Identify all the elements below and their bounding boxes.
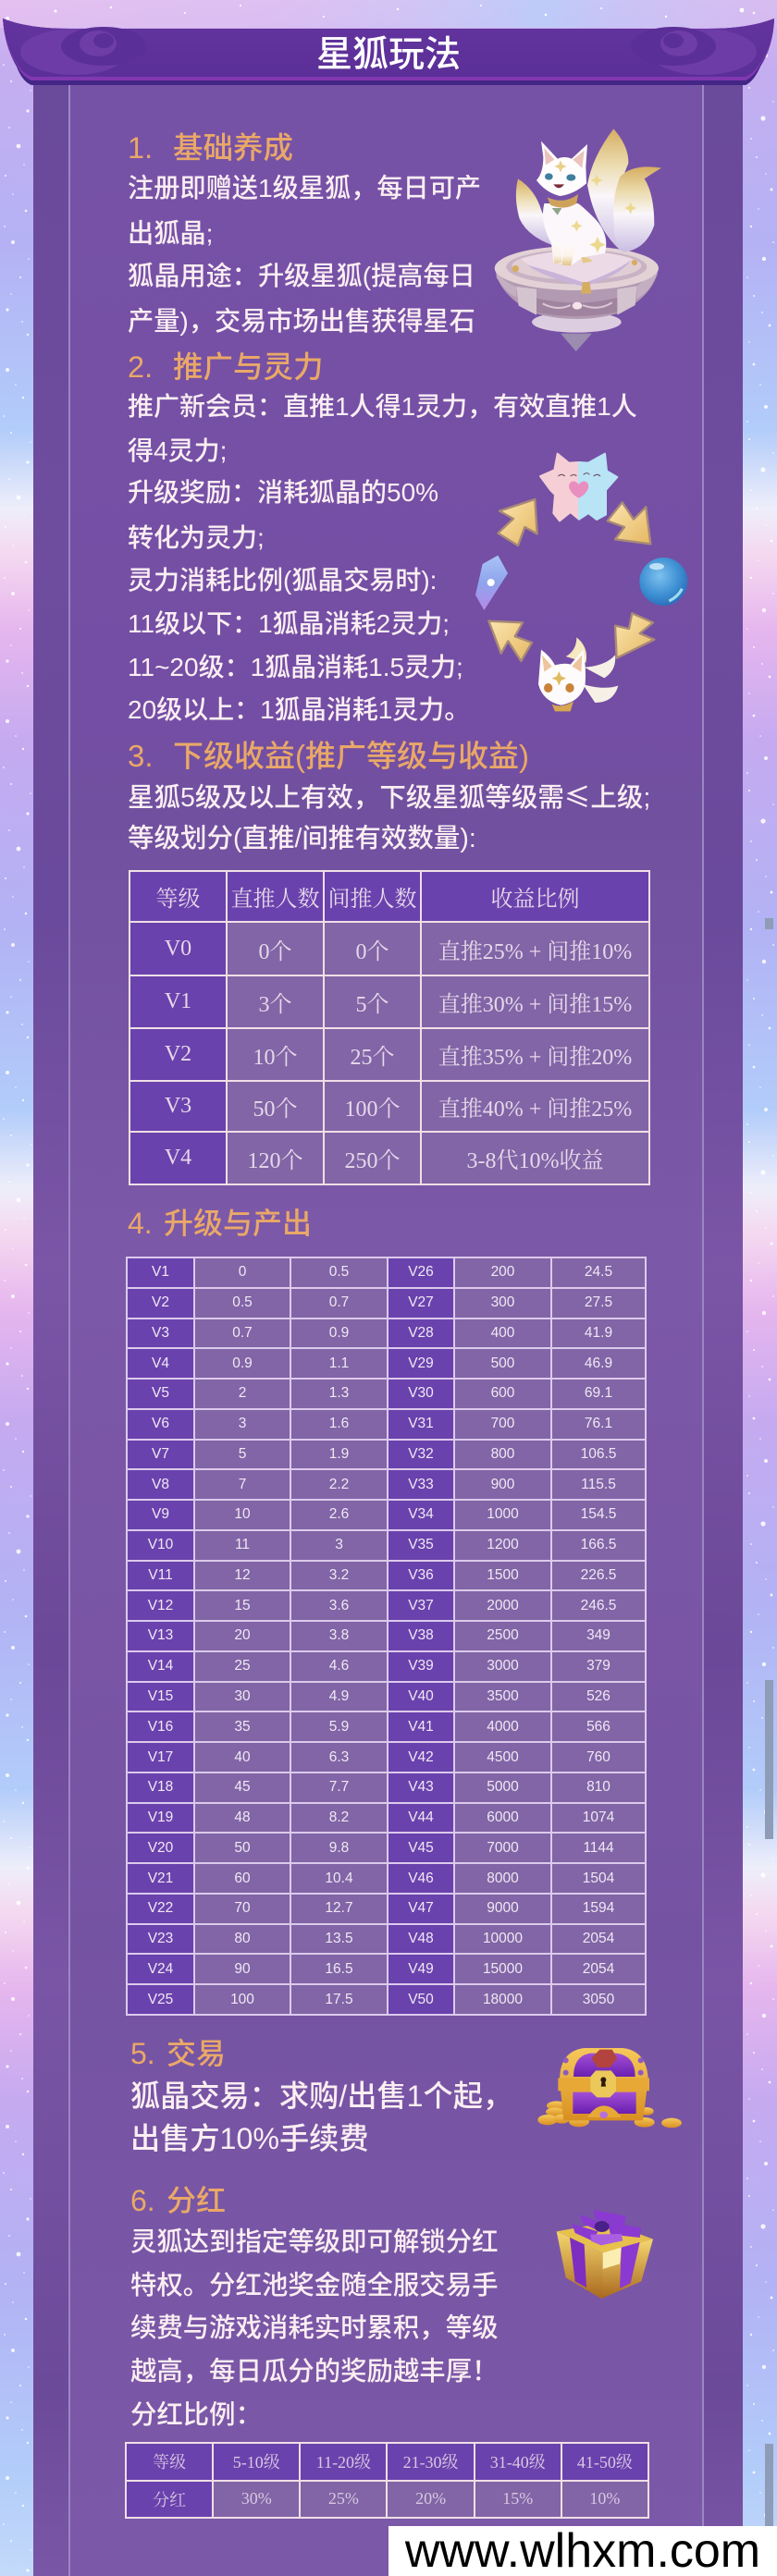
heading 6	[130, 2184, 226, 2217]
table: level output: 9.8	[329, 1840, 349, 1856]
section 2 text: 11级以下：1狐晶消耗2灵力;	[128, 609, 450, 638]
table: level output: 5	[239, 1446, 246, 1462]
table: level output: 1000	[487, 1506, 519, 1522]
table: level output: 1500	[487, 1567, 519, 1583]
icon: hugging stars	[540, 454, 617, 521]
table: promotion levels: 0个	[355, 939, 388, 963]
table: dividend ratios: 15%	[502, 2489, 533, 2508]
table: level output: V23	[148, 1931, 173, 1946]
table: level output: V2	[152, 1294, 169, 1310]
table: level output: 115.5	[581, 1477, 616, 1492]
table: level output: 226.5	[581, 1567, 616, 1583]
table: level output: 45	[234, 1779, 251, 1795]
table: level output: 526	[586, 1688, 610, 1704]
table: level output: 10000	[483, 1931, 523, 1946]
table: level output: 15000	[483, 1961, 523, 1977]
section 3: subordinate earnings	[128, 739, 650, 1185]
table: level output: V4	[152, 1355, 169, 1371]
table: level output: 166.5	[581, 1537, 616, 1552]
table: promotion levels	[129, 870, 650, 1185]
section 4: upgrades and output	[126, 1207, 647, 2016]
section 1 text	[128, 173, 481, 336]
table: level output: 13.5	[325, 1931, 353, 1946]
table: level output: V26	[408, 1264, 434, 1280]
table: level output: V21	[148, 1871, 173, 1886]
table: level output: V11	[148, 1567, 173, 1583]
table: level output: V35	[408, 1537, 434, 1552]
table: promotion levels: 25个	[350, 1046, 394, 1070]
table: level output: 8.2	[329, 1809, 349, 1825]
table: level output: V41	[408, 1719, 434, 1735]
table: level output: 1074	[583, 1809, 614, 1825]
section 2 text: 得4灵力;	[128, 436, 227, 465]
icon: chibi fox	[538, 637, 618, 711]
table: level output: 76.1	[585, 1416, 612, 1431]
table: level output: 760	[586, 1749, 610, 1765]
section 2 text: 升级奖励：消耗狐晶的50%	[128, 478, 438, 507]
table: level output: 27.5	[585, 1294, 612, 1310]
table: level output: V49	[408, 1961, 434, 1977]
table: level output: V17	[148, 1749, 173, 1765]
section 6 text: 特权。分红池奖金随全服交易手	[130, 2271, 498, 2300]
table: dividend ratios: 41-50级	[577, 2453, 633, 2472]
table: level output: V28	[408, 1325, 434, 1341]
table: level output: V34	[408, 1506, 434, 1522]
table: level output: 1.9	[329, 1446, 349, 1462]
table: level output: 2054	[583, 1931, 614, 1946]
table: level output: 0	[239, 1264, 246, 1280]
table: level output: 106.5	[581, 1446, 616, 1462]
heading 3: 下级收益(推广等级与收益)	[173, 739, 529, 773]
section 6 text	[130, 2227, 498, 2430]
table: promotion levels: 等级	[155, 888, 200, 912]
table: level output: V6	[152, 1416, 169, 1431]
table: level output: V16	[148, 1719, 173, 1735]
table: level output: 17.5	[325, 1992, 353, 2007]
table: level output: 4000	[487, 1719, 519, 1735]
table: level output: 700	[491, 1416, 514, 1431]
table: level output: V36	[408, 1567, 434, 1583]
section 3 text: 星狐5级及以上有效，下级星狐等级需 上级;	[128, 783, 650, 813]
table: level output: 2	[239, 1385, 246, 1401]
table: promotion levels: 120个	[248, 1149, 303, 1173]
table: level output: V37	[408, 1598, 434, 1613]
section 6: dividends	[125, 2184, 649, 2519]
table: level output: 60	[234, 1871, 251, 1886]
table: level output: 3.6	[329, 1598, 349, 1613]
heading 1: 1.	[128, 131, 153, 165]
table: level output: 4.6	[329, 1658, 349, 1674]
table: level output: V1	[152, 1264, 169, 1280]
table: promotion levels: 250个	[344, 1149, 400, 1173]
scroll artifacts at right edge	[765, 918, 773, 2526]
table: level output: 8000	[487, 1871, 519, 1886]
heading 6: 分红	[166, 2184, 226, 2217]
section 2 text: 20级以上：1狐晶消耗1灵力。	[128, 695, 470, 724]
table: level output: 41.9	[585, 1325, 612, 1341]
table: level output: 3050	[583, 1992, 614, 2007]
table: level output: 600	[491, 1385, 514, 1401]
table: level output: V5	[152, 1385, 169, 1401]
heading 3: 3.	[128, 739, 154, 773]
section 5 text: 狐晶交易：求购/出售1个起，	[130, 2079, 512, 2113]
section 2 text: 灵力消耗比例(狐晶交易时):	[128, 566, 437, 595]
table: level output: 40	[234, 1749, 251, 1765]
table: promotion levels: 5个	[355, 993, 388, 1017]
table: level output: 46.9	[585, 1355, 612, 1371]
table: level output: V42	[408, 1749, 434, 1765]
table: level output: 800	[491, 1446, 514, 1462]
table: promotion levels: V4	[165, 1146, 191, 1170]
table: level output: 1504	[583, 1871, 614, 1886]
table: dividend ratios: 21-30级	[403, 2453, 459, 2472]
table: level output: 90	[234, 1961, 251, 1977]
table: level output: V43	[408, 1779, 434, 1795]
table: level output: V33	[408, 1477, 434, 1492]
table: level output: 20	[234, 1627, 251, 1643]
table: level output: 0.7	[329, 1294, 349, 1310]
table: level output: V50	[408, 1992, 434, 2007]
table: level output: V14	[148, 1658, 173, 1674]
table: level output: V13	[148, 1627, 173, 1643]
table: level output: 18000	[483, 1992, 523, 2007]
heading 5: 5.	[130, 2037, 155, 2070]
table: level output: 0.5	[329, 1264, 349, 1280]
table: level output: 246.5	[581, 1598, 616, 1613]
table: level output: 100	[230, 1992, 254, 2007]
table: level output: 7000	[487, 1840, 519, 1856]
table: level output: 400	[491, 1325, 514, 1341]
section 2: promotion and spirit power	[128, 350, 637, 724]
table: promotion levels: 10个	[253, 1046, 298, 1070]
table: level output: 48	[234, 1809, 251, 1825]
title banner	[3, 18, 774, 85]
table: level output: 1.6	[329, 1416, 349, 1431]
table: level output: V48	[408, 1931, 434, 1946]
table: level output: 69.1	[585, 1385, 612, 1401]
table: level output: 7.7	[329, 1779, 349, 1795]
table: level output: V12	[148, 1598, 173, 1613]
table: level output: V30	[408, 1385, 434, 1401]
section 1: basic cultivation	[128, 131, 481, 336]
icon: gift box	[557, 2210, 653, 2299]
table: level output: 16.5	[325, 1961, 353, 1977]
section 2 text: 11~20级：1狐晶消耗1.5灵力;	[128, 653, 463, 681]
table: level output: 80	[234, 1931, 251, 1946]
table: promotion levels: 收益比例	[490, 888, 579, 912]
table: level output: V44	[408, 1809, 434, 1825]
table: level output: 7	[239, 1477, 246, 1492]
table: level output: 12.7	[325, 1900, 353, 1916]
table: level output: 3	[335, 1537, 343, 1552]
table: level output: 200	[491, 1264, 514, 1280]
section 1 text: 注册即赠送1级星狐，每日可产	[128, 173, 481, 202]
table: level output: 11	[235, 1537, 250, 1552]
table: level output: V46	[408, 1871, 434, 1886]
table: promotion levels: V3	[165, 1094, 191, 1118]
section 5: trading	[130, 2037, 512, 2155]
heading 2: 2.	[128, 350, 153, 384]
arrows	[488, 499, 654, 661]
section 2 text: 转化为灵力;	[128, 523, 265, 552]
banner title text: 星狐玩法	[316, 35, 461, 75]
section 1 text: 产量)，交易市场出售获得星石	[128, 306, 475, 336]
section 6 text: 灵狐达到指定等级即可解锁分红	[130, 2227, 498, 2257]
heading 1: 基础养成	[173, 131, 293, 165]
table: dividend ratios: 25%	[328, 2489, 359, 2508]
table: promotion levels: 直推25% + 间推10%	[438, 939, 632, 963]
table: level output: 154.5	[581, 1506, 616, 1522]
table: level output: V9	[152, 1506, 169, 1522]
table: level output: 6000	[487, 1809, 519, 1825]
table: level output: V22	[148, 1900, 173, 1916]
section 3 text	[128, 777, 650, 853]
table: promotion levels: V2	[165, 1042, 191, 1066]
table: level output: V47	[408, 1900, 434, 1916]
table: promotion levels: 0个	[259, 939, 292, 963]
heading 5: 交易	[166, 2037, 226, 2070]
table: level output: 12	[234, 1567, 251, 1583]
section 5 text	[130, 2079, 512, 2155]
section 6 text: 越高，每日瓜分的奖励越丰厚！	[130, 2357, 498, 2386]
illustration: spirit cycle with arrows	[475, 453, 688, 712]
table: level output: 24.5	[585, 1264, 612, 1280]
table: level output: 30	[234, 1688, 251, 1704]
table: promotion levels: V1	[165, 989, 191, 1013]
table: level output: 3.2	[329, 1567, 349, 1583]
table: level output: 2000	[487, 1598, 519, 1613]
table: level output: V45	[408, 1840, 434, 1856]
table: level output	[126, 1257, 647, 2016]
table: level output: 4500	[487, 1749, 519, 1765]
table: promotion levels: 直推人数	[231, 888, 320, 912]
table: level output: 300	[491, 1294, 514, 1310]
table: level output: 2500	[487, 1627, 519, 1643]
table: level output: V3	[152, 1325, 169, 1341]
table: level output: V40	[408, 1688, 434, 1704]
table: level output: 1.1	[329, 1355, 349, 1371]
table: promotion levels: 3-8代10%收益	[466, 1149, 603, 1173]
table: level output: 2054	[583, 1961, 614, 1977]
table: level output: V31	[408, 1416, 434, 1431]
section 3 text: 等级划分(直推/间推有效数量):	[128, 824, 476, 853]
table: level output: V29	[408, 1355, 434, 1371]
table: level output: 500	[491, 1355, 514, 1371]
table: promotion levels: 直推30% + 间推15%	[438, 993, 632, 1017]
icon: treasure chest with coins	[537, 2048, 682, 2128]
table: level output: V27	[408, 1294, 434, 1310]
table: level output: 379	[586, 1658, 610, 1674]
table: level output: 900	[491, 1477, 514, 1492]
section 6 text: 续费与游戏消耗实时累积，等级	[130, 2313, 498, 2343]
table: dividend ratios: 31-40级	[490, 2453, 546, 2472]
table: promotion levels: V0	[165, 936, 191, 960]
icon: blue orb	[639, 558, 687, 606]
section 2 text: 推广新会员：直推1人得1灵力，有效直推1人	[128, 392, 637, 421]
table: dividend ratios	[125, 2442, 649, 2519]
table: level output: 70	[234, 1900, 251, 1916]
table: level output: V10	[148, 1537, 173, 1552]
table: level output: 15	[234, 1598, 251, 1613]
table: level output: V7	[152, 1446, 169, 1462]
table: level output: 2.2	[329, 1477, 349, 1492]
table: level output: 25	[234, 1658, 251, 1674]
heading 2: 推广与灵力	[173, 350, 324, 384]
table: promotion levels: 间推人数	[327, 888, 416, 912]
table: level output: 4.9	[329, 1688, 349, 1704]
heading 5	[130, 2037, 226, 2070]
table: level output: V32	[408, 1446, 434, 1462]
table: dividend ratios: 5-10级	[233, 2453, 280, 2472]
table: level output: V39	[408, 1658, 434, 1674]
table: level output: 566	[586, 1719, 610, 1735]
table: dividend ratios: 等级	[153, 2453, 186, 2472]
table: level output: 10.4	[325, 1871, 353, 1886]
table: level output: 5.9	[329, 1719, 349, 1735]
table: level output: 810	[586, 1779, 610, 1795]
table: level output: 10	[234, 1506, 251, 1522]
table: promotion levels: 50个	[253, 1098, 298, 1122]
table: level output: 2.6	[329, 1506, 349, 1522]
table: level output: 0.5	[232, 1294, 253, 1310]
table: level output: 9000	[487, 1900, 519, 1916]
table: level output: 3500	[487, 1688, 519, 1704]
table: level output: V25	[148, 1992, 173, 2007]
table: dividend ratios: 10%	[589, 2489, 620, 2508]
table: level output: V38	[408, 1627, 434, 1643]
table: level output: V19	[148, 1809, 173, 1825]
table: promotion levels: 3个	[259, 993, 292, 1017]
table: level output: 0.7	[232, 1325, 253, 1341]
table: level output: 50	[234, 1840, 251, 1856]
section 1 text: 狐晶用途：升级星狐(提高每日	[128, 261, 475, 290]
table: promotion levels: 100个	[344, 1098, 400, 1122]
table: level output: V15	[148, 1688, 173, 1704]
table: dividend ratios: 20%	[415, 2489, 446, 2508]
section 1 text: 出狐晶;	[128, 218, 213, 248]
table: promotion levels: 直推35% + 间推20%	[438, 1046, 632, 1070]
table: level output: 0.9	[329, 1325, 349, 1341]
table: level output: 1144	[583, 1840, 614, 1856]
table: level output: 3	[239, 1416, 246, 1431]
table: level output: V24	[148, 1961, 173, 1977]
section 6 text: 分红比例：	[130, 2400, 262, 2430]
table: level output: 349	[586, 1627, 610, 1643]
table: level output: V8	[152, 1477, 169, 1492]
table: level output: 0.9	[232, 1355, 253, 1371]
section 3 text: ≤	[564, 777, 590, 815]
table: dividend ratios: 11-20级	[316, 2453, 371, 2472]
icon: crystal	[475, 556, 508, 610]
table: level output: 6.3	[329, 1749, 349, 1765]
section 2 text	[128, 392, 637, 724]
table: level output: 3.8	[329, 1627, 349, 1643]
table: level output: 1.3	[329, 1385, 349, 1401]
heading 4: 升级与产出	[164, 1207, 312, 1240]
table: dividend ratios: 30%	[241, 2489, 272, 2508]
table: level output: 1200	[487, 1537, 519, 1552]
table: level output: 35	[234, 1719, 251, 1735]
table: level output: 3000	[487, 1658, 519, 1674]
table: level output: 5000	[487, 1779, 519, 1795]
illustration: nine-tailed star fox on pedestal	[494, 129, 661, 351]
table: level output: 1594	[583, 1900, 614, 1916]
table: dividend ratios: 分红	[153, 2491, 186, 2509]
heading 4: 4.	[128, 1207, 153, 1240]
heading 6: 6.	[130, 2184, 155, 2217]
table: level output: V20	[148, 1840, 173, 1856]
table: promotion levels: 直推40% + 间推25%	[438, 1098, 632, 1122]
section 5 text: 出售方10%手续费	[130, 2122, 369, 2155]
table: level output: V18	[148, 1779, 173, 1795]
